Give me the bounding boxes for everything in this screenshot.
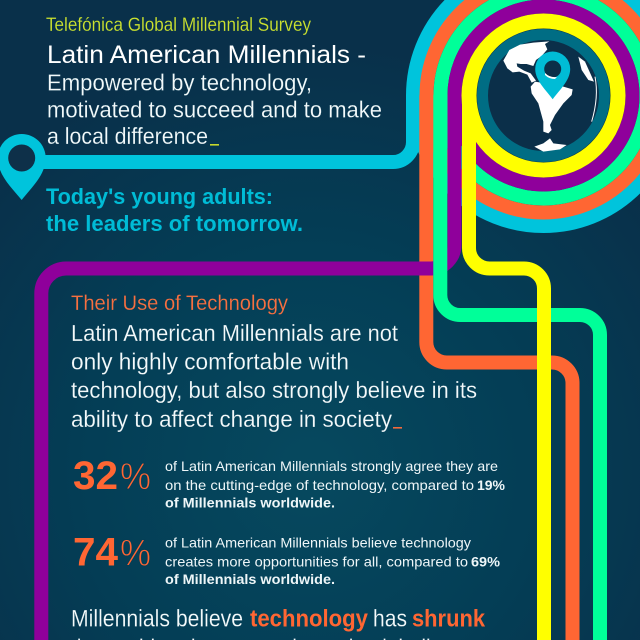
intro paragraph: ability to affect change in society	[71, 406, 392, 432]
panel: their use of technology	[71, 292, 506, 640]
stat: 32 percent: of Latin American Millennials strongly agree they are	[165, 458, 498, 474]
purple route framing the technology panel	[41, 95, 455, 640]
subtitle: Empowered by technology,	[47, 70, 312, 96]
stat: 32 percent: %	[120, 456, 151, 498]
closing statement: Millennials believe	[71, 606, 243, 632]
subtitle: a local difference	[47, 123, 208, 149]
cyan route to map pin	[25, 95, 413, 162]
stat: 74 percent: 69%	[471, 554, 501, 570]
closing statement: shrunk	[412, 606, 486, 632]
green route	[440, 95, 600, 640]
tagline: the leaders of tomorrow.	[46, 211, 303, 236]
subtitle: motivated to succeed and to make	[47, 96, 382, 122]
tagline: Today's young adults:	[46, 184, 273, 209]
stat: 32 percent: 32	[73, 454, 118, 498]
tagline	[46, 184, 303, 236]
closing statement: technology	[250, 606, 369, 632]
stat: 74 percent: of Millennials worldwide.	[165, 571, 335, 587]
concentric rainbow rings	[413, 0, 640, 226]
closing statement: has	[373, 606, 407, 632]
stat: 74 percent: creates more opportunities for all, compared to	[165, 554, 468, 570]
icon: globe with pin over Latin America	[482, 34, 604, 156]
header text block	[46, 15, 382, 149]
panel heading: Their Use of Technology	[71, 292, 288, 315]
intro paragraph: technology, but also strongly believe in its	[71, 377, 477, 403]
stat: 74 percent: 74	[73, 530, 119, 574]
intro paragraph: Latin American Millennials are not	[71, 320, 399, 346]
stat: 74 percent: of Latin American Millennials believe technology	[165, 534, 471, 550]
route lines	[25, 95, 600, 640]
subtitle	[47, 70, 382, 149]
stat: 74 percent: %	[120, 532, 151, 574]
survey name: Telefónica Global Millennial Survey	[46, 15, 311, 36]
yellow route	[469, 95, 544, 640]
stat: 32 percent	[73, 454, 506, 510]
intro paragraph: only highly comfortable with	[71, 348, 349, 374]
stat: 74 percent	[73, 530, 501, 587]
stat: 32 percent: of Millennials worldwide.	[165, 494, 335, 510]
closing statement	[71, 606, 486, 640]
stat: 32 percent: on the cutting-edge of technology, compared to	[165, 477, 474, 493]
main title: Latin American Millennials -	[47, 41, 366, 69]
icon: map pin on cyan route	[0, 134, 46, 200]
orange route	[426, 95, 572, 640]
stat: 32 percent: 19%	[477, 477, 506, 493]
intro paragraph	[71, 320, 477, 432]
